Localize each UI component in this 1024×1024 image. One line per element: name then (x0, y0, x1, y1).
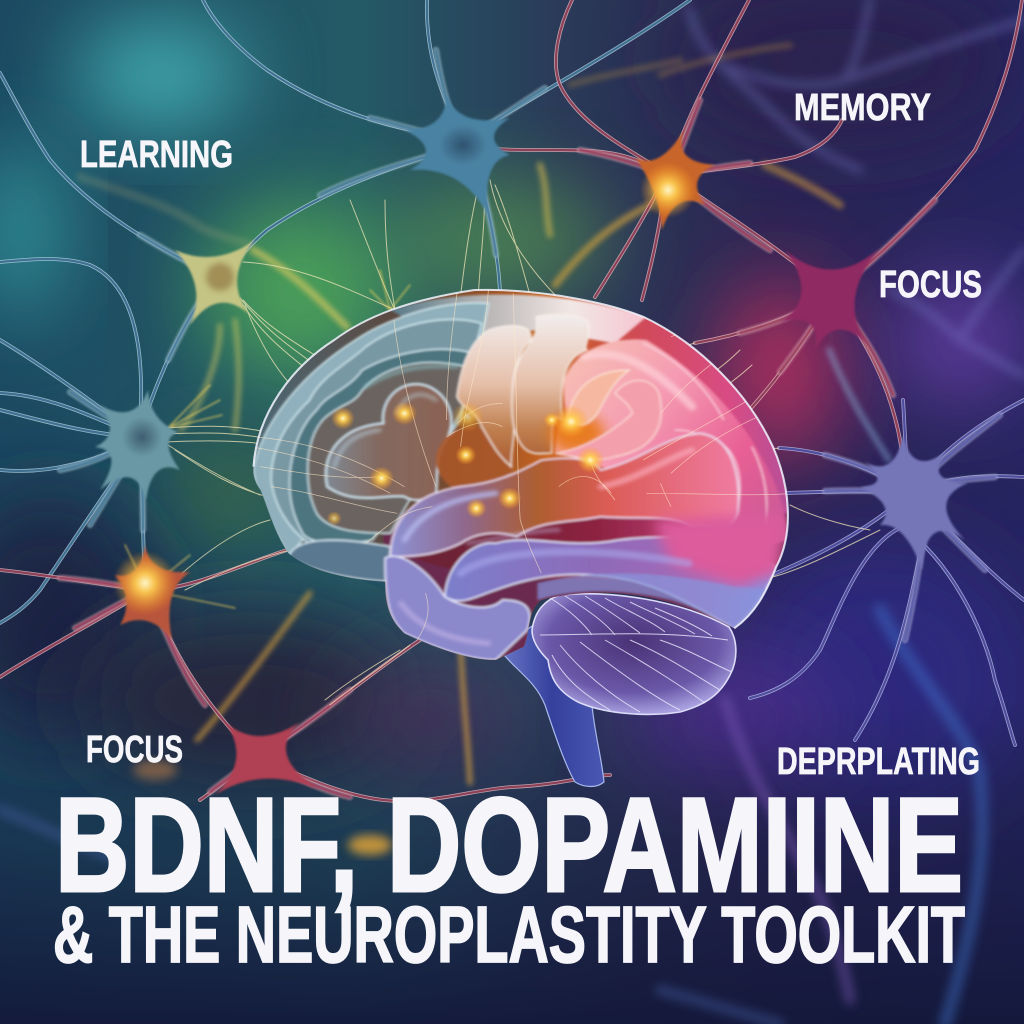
central pale fold two (512, 315, 589, 454)
pink bleed at lower right (654, 513, 787, 587)
lavender lower edge (538, 573, 776, 633)
temporal upper band (390, 433, 739, 557)
top strip (390, 294, 647, 343)
soma: red neuron (215, 722, 320, 795)
fine fibres reaching brain (165, 180, 880, 705)
lower left lobe (385, 556, 530, 660)
soma: left teal neuron (95, 390, 180, 500)
orange glow centre (548, 413, 604, 453)
fine fibres over brain (250, 287, 794, 660)
label: learning: LEARNING (80, 134, 233, 176)
dendrites: red (0, 0, 1022, 801)
central orange-brown recess (436, 427, 513, 493)
soft highlights (334, 354, 692, 643)
soma: magenta neuron (780, 248, 880, 350)
label: memory: MEMORY (794, 87, 931, 129)
label: focus right: FOCUS (879, 264, 982, 306)
lower right purple band (445, 537, 776, 628)
cerebellum (532, 594, 736, 714)
brain outline (254, 290, 788, 628)
pink upper area (555, 339, 787, 557)
pink fold (555, 380, 661, 460)
dendrites: blue (0, 0, 690, 623)
soma: orange neuron (636, 130, 715, 230)
lower left teal lobe (289, 540, 390, 582)
lower base fill (383, 513, 790, 660)
dendrites: purple (750, 400, 1024, 745)
label: focus left: FOCUS (86, 729, 183, 771)
yellow sparks rays (125, 270, 410, 608)
synapse sparks (326, 401, 604, 526)
neuron network (0, 0, 1024, 801)
lower recess (416, 517, 684, 580)
soma: green yellow neuron (175, 240, 255, 325)
soma: purple neuron (860, 435, 968, 570)
central pale fold one (457, 326, 531, 467)
soma: upper centre neuron (405, 95, 510, 215)
left shell folds (254, 303, 489, 557)
brain (250, 287, 794, 660)
left brown lobe (326, 384, 451, 500)
right pink folds (642, 342, 770, 520)
brain stem (500, 620, 604, 786)
soma: yellow neuron (113, 545, 190, 640)
